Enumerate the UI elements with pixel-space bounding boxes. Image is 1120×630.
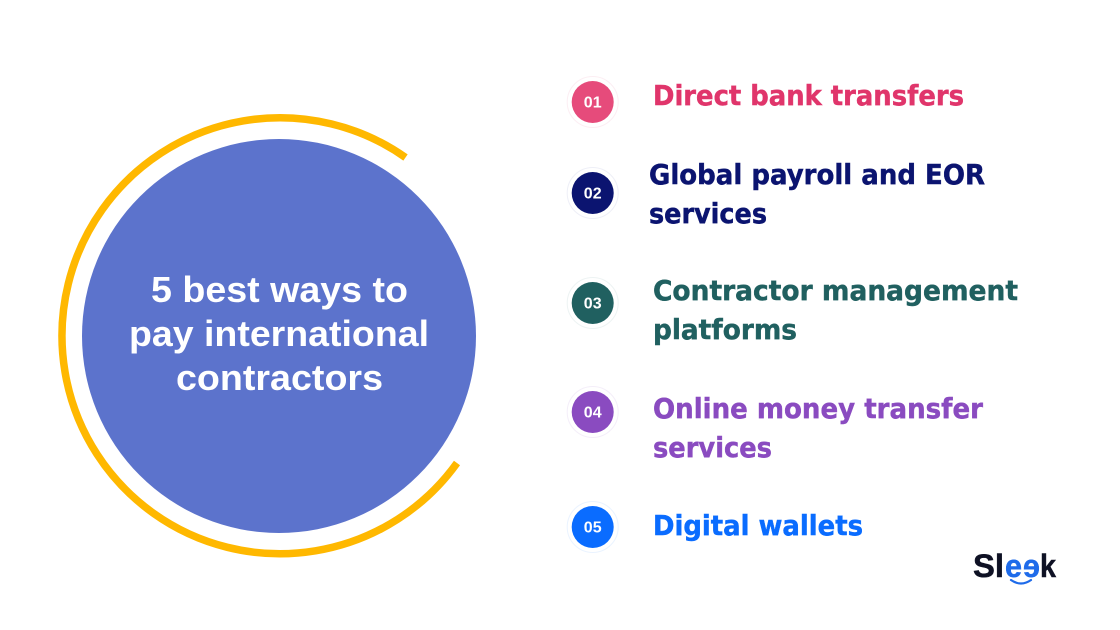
label: Digital wallets: Digital wallets xyxy=(653,510,863,542)
item 04 xyxy=(567,386,983,464)
item 02 xyxy=(567,159,985,230)
title xyxy=(129,269,429,398)
logo: Sleek: e xyxy=(1005,548,1022,584)
item 03 xyxy=(567,275,1018,346)
logo: Sleek: e xyxy=(1023,548,1040,584)
label: Online money transfer services: Online money transfer xyxy=(653,393,983,425)
item 01 xyxy=(567,76,964,128)
logo: Sleek xyxy=(973,548,1056,584)
label: Contractor management platforms: Contractor management xyxy=(653,275,1018,307)
central graphic: circle with arc and title xyxy=(62,118,476,554)
title: 5 best ways to xyxy=(151,269,408,310)
badge 03 xyxy=(567,278,618,328)
yellow arc ring xyxy=(62,118,457,554)
badge 02: 02 xyxy=(584,186,602,202)
badge 04: 04 xyxy=(584,404,602,422)
blue circle xyxy=(82,139,476,533)
label: Global payroll and EOR services: Global payroll and EOR xyxy=(649,159,985,191)
label: Global payroll and EOR services xyxy=(649,159,985,230)
logo: Sleek: k xyxy=(1040,548,1056,584)
logo: Sleek: Sl xyxy=(973,548,1004,584)
badge 01 xyxy=(567,76,618,128)
badge 04 xyxy=(567,386,618,438)
badge 05: 05 xyxy=(584,520,602,536)
badge 02 xyxy=(567,168,618,218)
label: Online money transfer services: services xyxy=(653,432,772,464)
item 05 xyxy=(567,502,863,552)
label: Online money transfer services xyxy=(653,393,983,464)
logo smile xyxy=(1011,580,1031,584)
badge 03: 03 xyxy=(584,296,602,312)
title: pay international xyxy=(129,313,429,354)
title: contractors xyxy=(176,357,383,398)
label: Contractor management platforms: platforms xyxy=(653,314,797,346)
badge 01: 01 xyxy=(584,94,602,112)
label: Global payroll and EOR services: services xyxy=(649,198,767,230)
label: Direct bank transfers: Direct bank transfers xyxy=(653,80,964,112)
label: Contractor management platforms xyxy=(653,275,1018,346)
badge 05 xyxy=(567,502,618,552)
